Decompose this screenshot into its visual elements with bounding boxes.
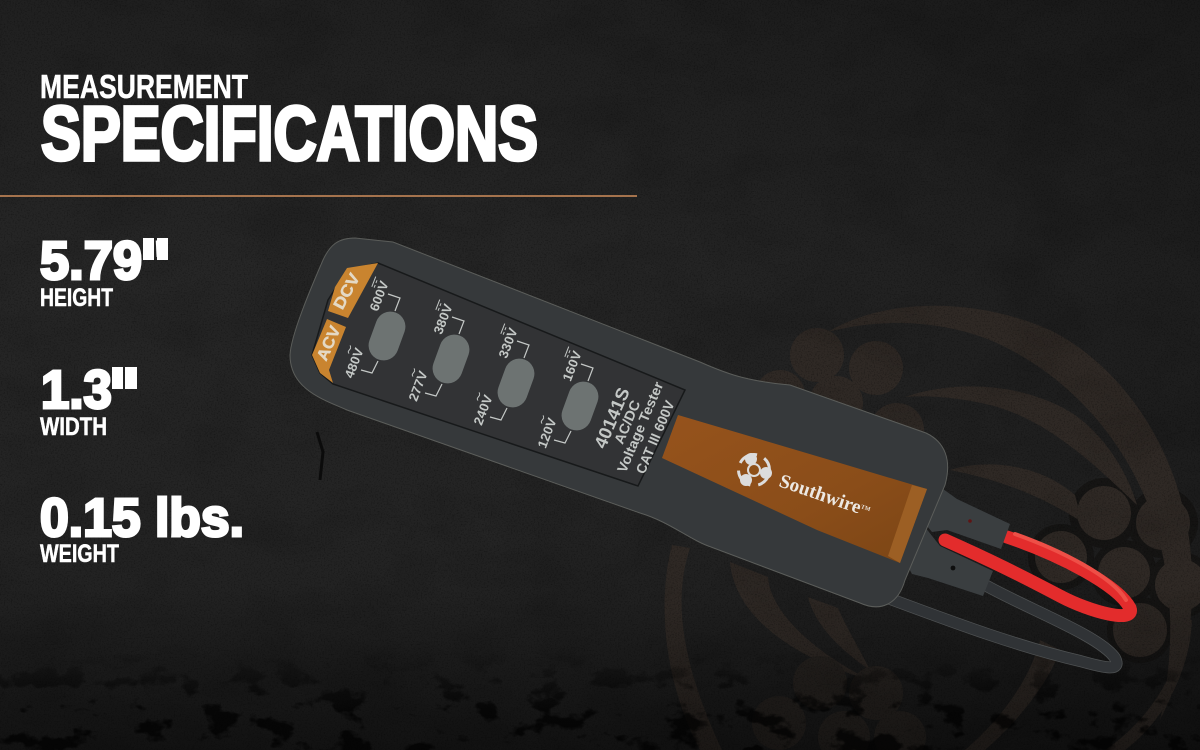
model text: AC/DC [611,398,643,446]
indicator 380V/277V: 380V [430,302,456,336]
brand badge [662,415,927,563]
indicator 330V/240V: 240V [470,393,496,427]
spec: weight: 0.15 lbs. [40,488,244,548]
DCV tab: DCV [331,271,364,312]
title [40,69,538,177]
black test lead [885,585,1117,667]
spec: height: 5.79'' [40,231,167,291]
lead connectors [902,484,1010,596]
spec: weight: WEIGHT [40,540,119,568]
indicator 380V/277V [403,300,474,403]
watermark logo [665,306,1200,750]
spec: height: HEIGHT [40,284,113,312]
label panel [312,263,685,486]
model text [590,379,678,476]
icon: Southwire logo [738,453,772,486]
DCV tab [328,263,378,318]
indicator 600V/480V: 600V [366,279,392,313]
model text: Voltage Tester [614,379,667,475]
indicator 160V/120V [532,347,603,450]
ACV tab: ACV [314,323,345,364]
spec: width: 1.3'' [41,360,136,420]
indicator 380V/277V: 277V [405,369,431,403]
indicator 160V/120V: 160V [559,349,585,383]
spec: width: WIDTH [40,413,107,441]
indicator 600V/480V: 480V [341,346,367,380]
indicator 160V/120V: 120V [534,416,560,450]
red test lead [945,534,1131,616]
model text: CAT III 600V [632,397,678,476]
indicator 600V/480V [339,277,410,380]
brand name: Southwire [776,471,864,518]
indicator 330V/240V [468,324,539,427]
model text: 40141S [590,385,634,451]
ACV tab [312,319,346,383]
indicator 330V/240V: 330V [495,326,521,360]
tester body [290,238,948,607]
title: MEASUREMENT [40,69,248,106]
brand name: TM [860,504,871,513]
title: SPECIFICATIONS [41,91,538,177]
divider line [0,195,637,197]
